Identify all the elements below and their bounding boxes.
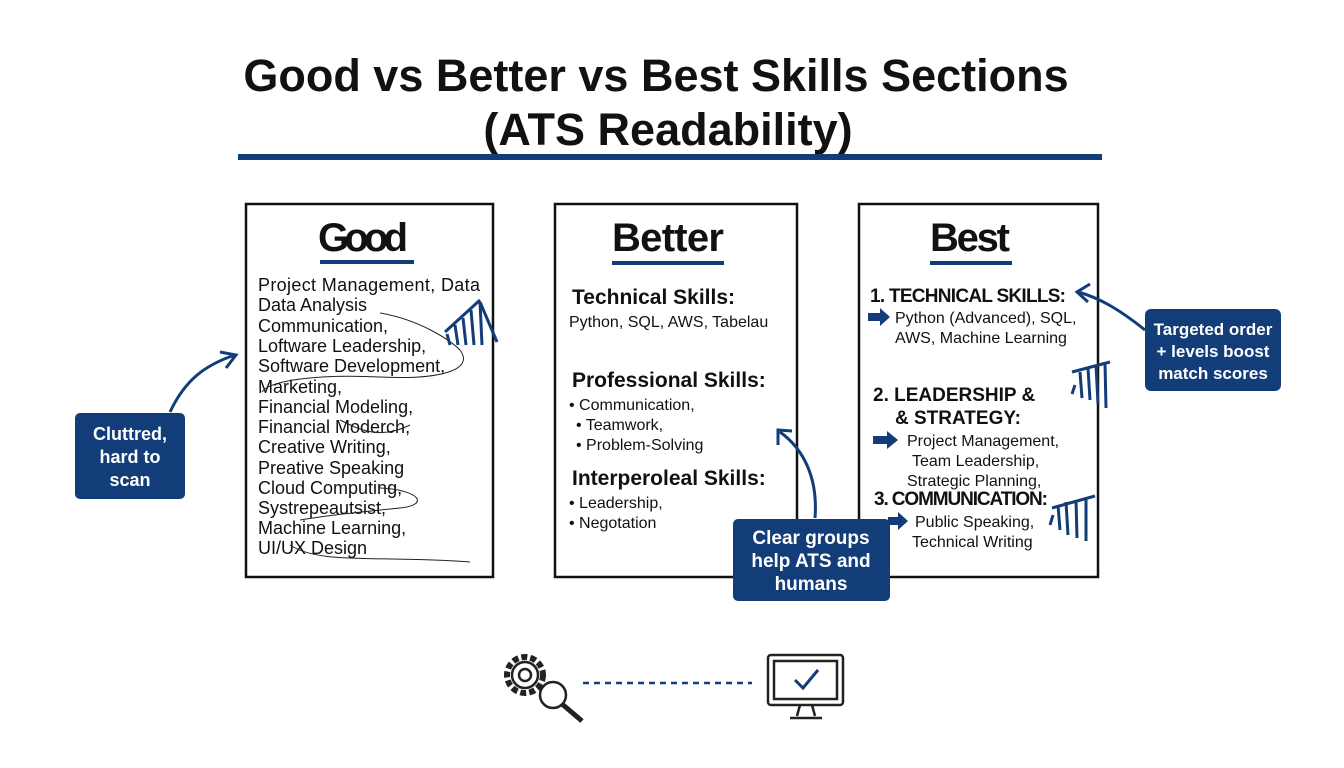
text: grouped skills: • Communication, <box>569 397 695 414</box>
text: cluttered skills list: Systrepeautsist, <box>258 498 386 518</box>
icon: hatch marks <box>445 300 497 345</box>
arrow: clear groups to better <box>778 430 815 518</box>
text: ordered skills: Technical Writing <box>912 534 1033 551</box>
text: cluttered skills list: Data Analysis <box>258 295 367 315</box>
text: grouped skills: Professional Skills: <box>572 369 766 392</box>
callout: cluttered <box>75 413 185 499</box>
text: cluttered skills list: Marketing, <box>258 377 342 397</box>
scribbles <box>262 313 470 562</box>
text: ordered skills: Strategic Planning, <box>907 473 1041 490</box>
text: ordered skills: 1. TECHNICAL SKILLS: <box>870 286 1066 307</box>
callout: clear groups: humans <box>775 574 847 595</box>
callout: cluttered: scan <box>109 470 151 490</box>
text: cluttered skills list: Cloud Computing, <box>258 478 402 498</box>
panel: good <box>246 204 497 577</box>
text: grouped skills <box>569 286 768 532</box>
text: cluttered skills list: Communication, <box>258 316 388 336</box>
callout: targeted order <box>1145 309 1281 391</box>
text: grouped skills: Python, SQL, AWS, Tabelau <box>569 314 768 331</box>
callout: targeted order: match scores <box>1158 364 1268 383</box>
callout: cluttered: Cluttred, <box>93 424 167 444</box>
text: ordered skills: & STRATEGY: <box>895 408 1021 429</box>
callout: targeted order: Targeted order <box>1154 320 1273 339</box>
callout: targeted order: + levels boost <box>1157 342 1270 361</box>
heading: good: Good <box>318 216 408 260</box>
callout: clear groups <box>733 519 890 601</box>
text: cluttered skills list: Machine Learning, <box>258 518 406 538</box>
text: grouped skills: • Teamwork, <box>576 417 663 434</box>
text: ordered skills: 3. COMMUNICATION: <box>874 489 1048 510</box>
text: ordered skills: Public Speaking, <box>915 514 1034 531</box>
text: grouped skills: • Negotation <box>569 515 656 532</box>
text: cluttered skills list: UI/UX Design <box>258 538 367 558</box>
text: cluttered skills list: Project Management, Data <box>258 275 481 295</box>
text: ordered skills: Project Management, <box>907 433 1059 450</box>
icon: monitor with check <box>768 655 843 718</box>
title <box>243 50 1069 155</box>
text: cluttered skills list <box>258 275 481 558</box>
callout: clear groups: help ATS and <box>751 551 871 572</box>
text: cluttered skills list: Loftware Leadership, <box>258 336 426 356</box>
text: grouped skills: Interperoleal Skills: <box>572 467 766 490</box>
text: ordered skills: AWS, Machine Learning <box>895 330 1067 347</box>
text: cluttered skills list: Preative Speaking <box>258 458 404 478</box>
icons: bullet arrows <box>868 308 908 530</box>
arrow: targeted order to best <box>1077 284 1145 330</box>
text: cluttered skills list: Financial Moderch, <box>258 417 410 437</box>
callout: cluttered: hard to <box>100 447 161 467</box>
icon: gear with magnifier <box>507 657 582 721</box>
text: grouped skills: • Leadership, <box>569 495 663 512</box>
text: cluttered skills list: Creative Writing, <box>258 437 391 457</box>
arrow: cluttered to good <box>170 352 236 412</box>
text: ordered skills: Team Leadership, <box>912 453 1039 470</box>
panel: better <box>555 204 797 577</box>
heading: better: Better <box>612 216 724 260</box>
connector: dashed line <box>583 682 752 684</box>
text: cluttered skills list: Financial Modeling, <box>258 397 413 417</box>
text: ordered skills: 2. LEADERSHIP & <box>873 385 1036 406</box>
title: (ATS Readability) <box>483 104 853 155</box>
heading: best: Best <box>930 216 1010 260</box>
callout: clear groups: Clear groups <box>752 528 870 549</box>
text: grouped skills: • Problem-Solving <box>576 437 703 454</box>
text: ordered skills <box>870 286 1076 551</box>
icon: hatch marks <box>1050 362 1110 541</box>
text: cluttered skills list: Software Development, <box>258 356 445 376</box>
text: grouped skills: Technical Skills: <box>572 286 735 309</box>
panel: best <box>859 204 1110 577</box>
title: Good vs Better vs Best Skills Sections <box>243 50 1069 101</box>
text: ordered skills: Python (Advanced), SQL, <box>895 310 1076 327</box>
